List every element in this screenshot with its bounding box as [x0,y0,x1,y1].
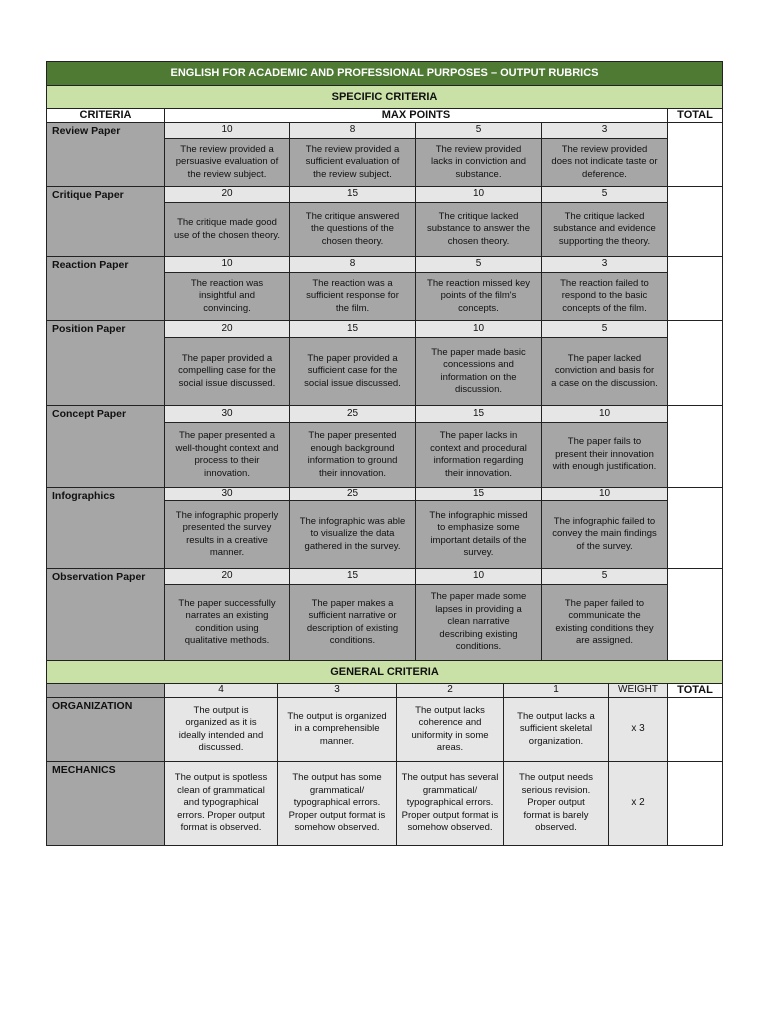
rubric table: MAX POINTS [382,109,450,121]
row: critique paper [46,187,723,256]
row: organization: The output is organized as it is ideally intended and discussed. [179,704,263,753]
row: critique paper: The critique made good use of the chosen theory. [174,217,280,240]
general header row: 3 [334,684,340,695]
row: mechanics: The output is spotless clean of grammatical and typographical errors. Proper output format is observed. [175,772,267,833]
row: review paper: The review provided lacks in conviction and substance. [431,144,526,180]
row: organization: The output lacks a sufficient skeletal organization. [517,711,595,747]
general header row: 2 [447,684,453,695]
row: infographics: 15 [473,488,484,499]
row: position paper: 15 [347,323,358,334]
row: critique paper: 15 [347,188,358,199]
general header row: 4 [218,684,224,695]
row: infographics: 10 [599,488,610,499]
row: reaction paper: 3 [602,258,607,269]
general criteria heading [46,660,723,684]
row: concept paper: 10 [599,408,610,419]
row: review paper: 8 [350,124,355,135]
row: observation paper: 5 [602,570,607,581]
row: position paper: The paper made basic concessions and information on the discussion. [431,346,526,395]
general header row: 1 [553,684,559,695]
row: critique paper: The critique lacked substance to answer the chosen theory. [427,211,530,247]
row: critique paper: 20 [221,188,233,199]
general header row: WEIGHT [618,684,658,695]
row: concept paper: 25 [347,408,358,419]
row: observation paper: 20 [221,570,233,581]
row: critique paper: 10 [473,188,484,199]
row: concept paper [46,406,723,487]
row: infographics: The infographic properly presented the survey results in a creative manner. [176,510,278,558]
row: mechanics: The output needs serious revision. Proper output format is barely observed. [519,772,593,833]
row: review paper: 3 [602,124,607,135]
row: critique paper: The critique answered the questions of the chosen theory. [306,211,399,247]
row: infographics: The infographic failed to convey the main findings of the survey. [552,516,657,552]
row: reaction paper: The reaction missed key points of the film's concepts. [427,278,530,314]
row: mechanics: MECHANICS [52,764,116,776]
row: position paper: 5 [602,323,607,334]
row: review paper: The review provided a sufficient evaluation of the review subject. [306,144,399,180]
row: observation paper: 15 [347,570,358,581]
title bar: ENGLISH FOR ACADEMIC AND PROFESSIONAL PURPOSES – OUTPUT RUBRICS [170,67,599,79]
row: position paper: The paper provided a compelling case for the social issue discussed. [178,353,276,389]
row: concept paper: The paper lacks in context and procedural information regarding their innovation. [430,430,527,478]
general header row: TOTAL [677,684,713,696]
row: critique paper: Critique Paper [52,189,124,201]
row: observation paper [46,569,723,660]
row: review paper [46,123,723,186]
row: organization [46,698,723,761]
specific criteria heading [46,85,723,109]
row: infographics: The infographic was able to visualize the data gathered in the survey. [300,516,405,552]
row: reaction paper: The reaction was a sufficient response for the film. [306,278,399,314]
row: reaction paper: Reaction Paper [52,259,128,271]
general criteria heading: GENERAL CRITERIA [330,666,439,678]
row: review paper: The review provided a persuasive evaluation of the review subject. [176,144,278,180]
row: mechanics [46,762,723,846]
row: concept paper: 30 [221,408,233,419]
header row: CRITERIA [80,109,131,121]
row: position paper [46,321,723,405]
row: critique paper: The critique lacked substance and evidence supporting the theory. [553,211,656,247]
row: reaction paper [46,257,723,320]
row: reaction paper: 10 [221,258,233,269]
row: infographics: 30 [221,488,233,499]
row: review paper: 10 [221,124,233,135]
row: concept paper: 15 [473,408,484,419]
row: concept paper: The paper presented enough background information to ground their innovation. [308,430,397,478]
row: reaction paper: 8 [350,258,355,269]
row: reaction paper: 5 [476,258,481,269]
row: position paper: Position Paper [52,323,126,335]
row: concept paper: Concept Paper [52,408,126,420]
row: mechanics: The output has several grammatical/ typographical errors. Proper output format is somehow observed. [402,772,498,833]
row: infographics: 25 [347,488,358,499]
row: infographics: The infographic missed to emphasize some important details of the survey. [429,510,528,558]
row: observation paper: The paper successfully narrates an existing condition using qualitative methods. [178,598,276,646]
general header row [46,684,723,697]
row: mechanics: x 2 [631,797,645,808]
row: infographics [46,488,723,568]
row: observation paper: The paper makes a sufficient narrative or description of existing conditions. [307,598,398,646]
row: critique paper: 5 [602,188,607,199]
row: reaction paper: The reaction was insightful and convincing. [191,278,263,314]
row: infographics: Infographics [52,490,115,502]
row: position paper: 10 [473,323,484,334]
header row [46,108,165,123]
row: organization: ORGANIZATION [52,700,132,712]
row: organization: The output is organized in a comprehensible manner. [287,711,387,747]
row: observation paper: The paper made some lapses in providing a clean narrative describing existing conditions. [431,591,526,652]
row: mechanics: The output has some grammatical/ typographical errors. Proper output format is somehow observed. [289,772,385,833]
row: review paper: Review Paper [52,125,120,137]
row: position paper: 20 [221,323,233,334]
specific criteria heading: SPECIFIC CRITERIA [332,91,437,103]
rubric table: TOTAL [677,109,713,121]
row: organization: x 3 [631,723,645,734]
row: review paper: The review provided does not indicate taste or deference. [551,144,658,180]
row: concept paper: The paper presented a well-thought context and process to their innovation. [176,430,278,478]
row: position paper: The paper provided a sufficient case for the social issue discussed. [304,353,401,389]
row: observation paper: Observation Paper [52,571,145,583]
row: observation paper: 10 [473,570,484,581]
title bar [46,61,723,86]
row: reaction paper: The reaction failed to respond to the basic concepts of the film. [560,278,649,314]
row: review paper: 5 [476,124,481,135]
row: position paper: The paper lacked conviction and basis for a case on the discussion. [551,353,658,389]
row: concept paper: The paper fails to present their innovation with enough justification. [553,436,656,472]
row: observation paper: The paper failed to communicate the existing conditions they are assigned. [555,598,654,646]
row: organization: The output lacks coherence and uniformity in some areas. [411,704,489,753]
